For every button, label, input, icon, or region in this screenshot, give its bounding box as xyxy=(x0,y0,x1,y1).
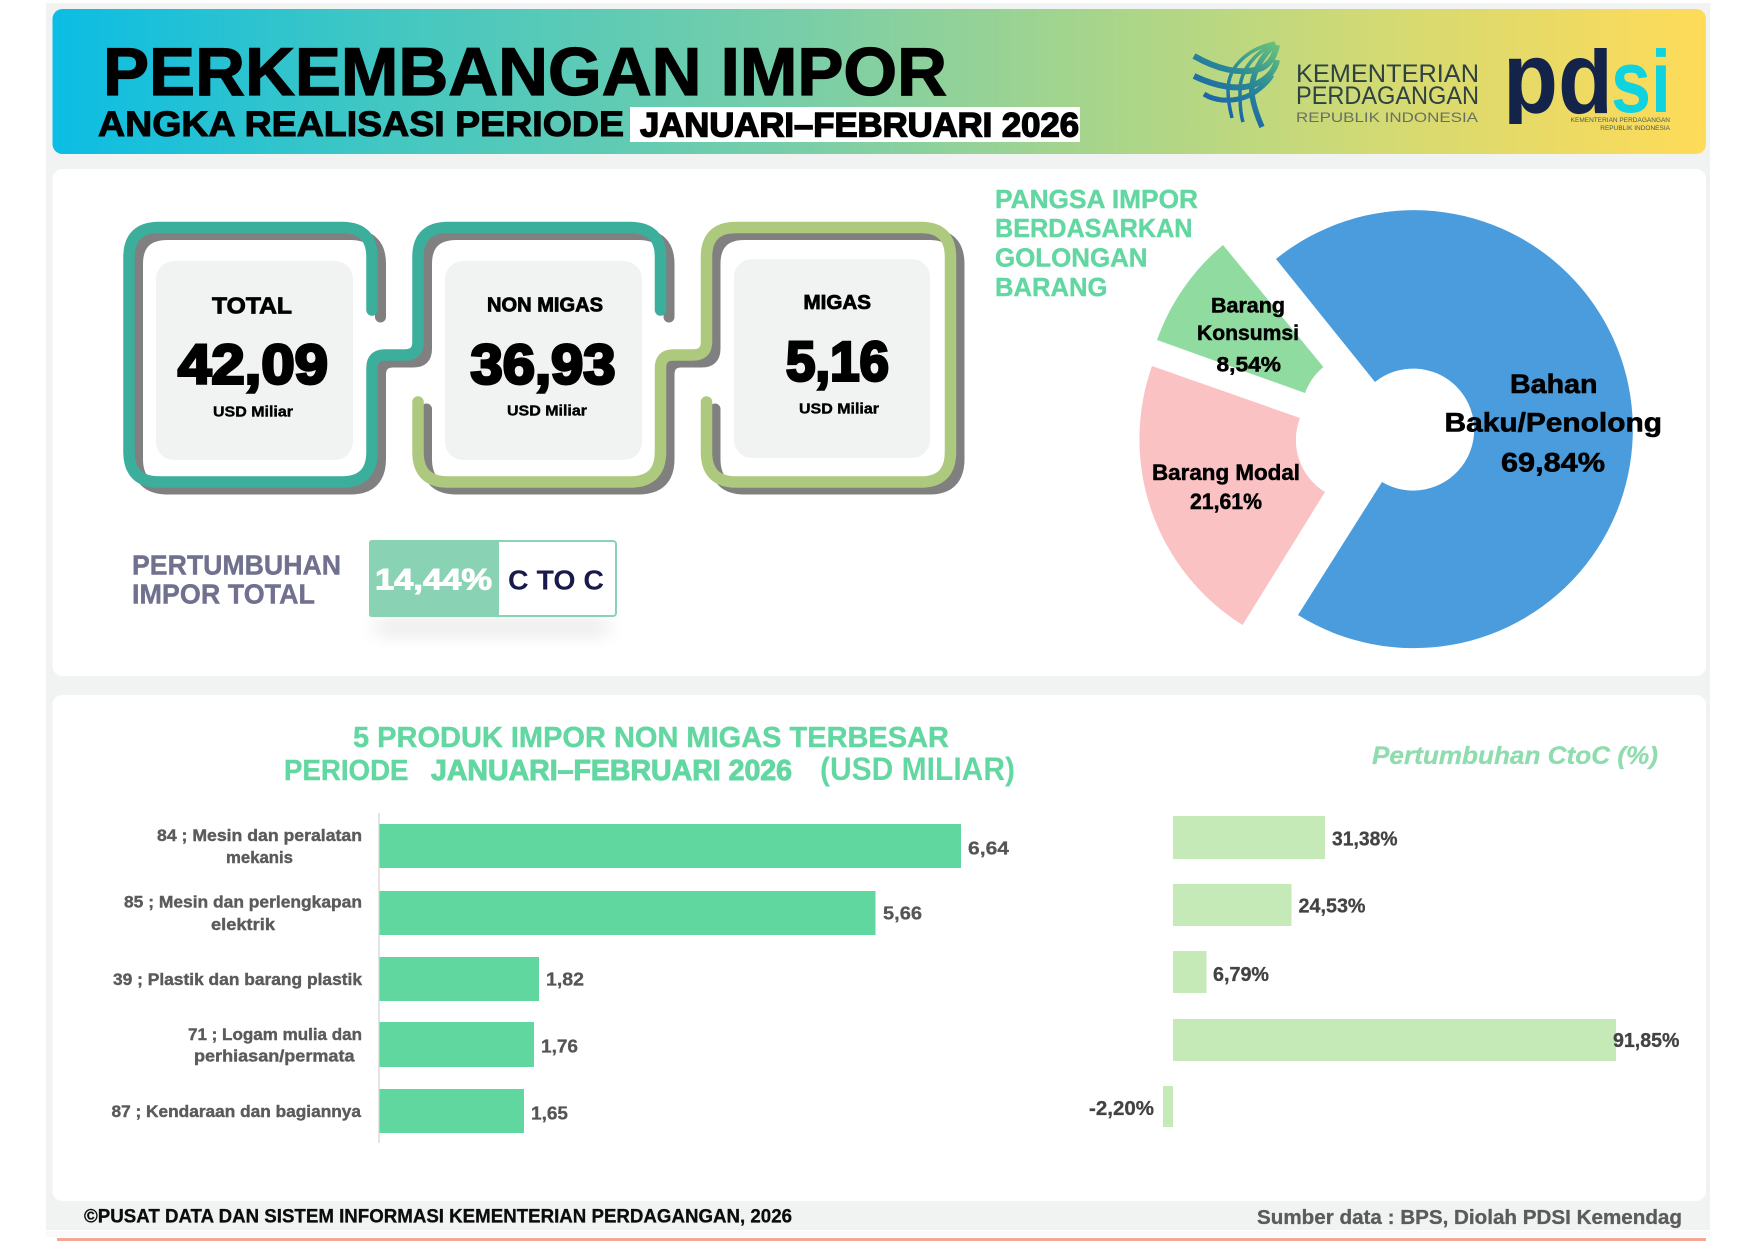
panel: summary and share xyxy=(52,169,1706,676)
chart heading: PERIODE xyxy=(284,755,408,787)
slice: barang modal: 21,61% xyxy=(1190,489,1262,514)
kpi: non migas: 36,93 xyxy=(470,332,616,396)
period highlight: JANUARI–FEBRUARI 2026 xyxy=(640,106,1079,144)
kpi: total xyxy=(156,261,353,460)
row: kendaraan: 87 ; Kendaraan dan bagiannya xyxy=(112,1103,362,1121)
pdsi logo: si xyxy=(1611,32,1671,131)
pie chart xyxy=(1139,210,1662,648)
ministry name: KEMENTERIAN xyxy=(1296,60,1479,88)
share heading: BARANG xyxy=(995,272,1108,302)
growth heading: Pertumbuhan CtoC (%) xyxy=(1372,742,1658,770)
growth label: PERTUMBUHAN xyxy=(132,550,341,580)
row: mesin dan peralatan xyxy=(157,824,1010,868)
chart heading xyxy=(284,722,1015,787)
slice: bahan baku: 69,84% xyxy=(1501,448,1605,478)
chart heading: (USD MILIAR) xyxy=(820,751,1015,787)
row: logam mulia: perhiasan/permata xyxy=(194,1048,355,1066)
pdsi logo: REPUBLIK INDONESIA xyxy=(1600,125,1671,132)
row: plastik: 1,82 xyxy=(546,968,584,990)
kpi: migas: MIGAS xyxy=(804,292,871,314)
row: mesin dan peralatan: 84 ; Mesin dan peralatan xyxy=(157,827,362,845)
bar chart: growth: 31,38% xyxy=(1332,828,1398,850)
connected KPI frames xyxy=(129,228,959,489)
kpi: migas: USD Miliar xyxy=(799,400,879,418)
footer source: Sumber data : BPS, Diolah PDSI Kemendag xyxy=(1257,1207,1682,1229)
kpi: total: 42,09 xyxy=(178,332,328,396)
row: mesin dan perlengkapan: 85 ; Mesin dan perlengkapan xyxy=(124,894,362,912)
chart heading: JANUARI–FEBRUARI 2026 xyxy=(431,755,792,787)
row: mesin dan perlengkapan xyxy=(124,891,922,935)
kpi: total: USD Miliar xyxy=(213,404,293,420)
title: PERKEMBANGAN IMPOR xyxy=(103,34,947,110)
subtitle: ANGKA REALISASI PERIODE xyxy=(98,105,624,144)
row: logam mulia: 71 ; Logam mulia dan xyxy=(188,1026,362,1044)
slice: barang konsumsi: Konsumsi xyxy=(1197,322,1299,345)
slice: bahan baku: Bahan xyxy=(1510,369,1598,399)
pdsi logo xyxy=(1508,48,1670,130)
ministry name: REPUBLIK INDONESIA xyxy=(1296,109,1479,125)
share heading: GOLONGAN xyxy=(995,242,1148,272)
kpi: migas: 5,16 xyxy=(786,330,889,392)
slice: barang konsumsi: 8,54% xyxy=(1216,354,1281,376)
growth badge: C TO C xyxy=(508,564,604,596)
icon: ministry emblem xyxy=(1194,43,1277,127)
slice: bahan baku: Baku/Penolong xyxy=(1444,408,1662,438)
row: mesin dan peralatan: 6,64 xyxy=(968,838,1010,858)
footer credit: ©PUSAT DATA DAN SISTEM INFORMASI KEMENTERIAN PERDAGANGAN, 2026 xyxy=(84,1206,792,1228)
kpi: non migas: NON MIGAS xyxy=(487,294,603,316)
pdsi logo: pd xyxy=(1503,21,1613,135)
bar chart: growth: -2,20% xyxy=(1089,1098,1154,1120)
pdsi logo: KEMENTERIAN PERDAGANGAN xyxy=(1571,117,1670,124)
slice: barang modal: Barang Modal xyxy=(1152,460,1300,485)
slice: barang konsumsi: Barang xyxy=(1211,294,1285,318)
row: mesin dan perlengkapan: 5,66 xyxy=(883,902,922,924)
share heading xyxy=(995,184,1198,302)
kpi: non migas xyxy=(445,261,642,460)
bar chart: import value xyxy=(112,813,1010,1143)
row: mesin dan peralatan: mekanis xyxy=(226,849,293,867)
header banner xyxy=(52,9,1706,154)
row: plastik: 39 ; Plastik dan barang plastik xyxy=(113,971,363,989)
bar chart: growth xyxy=(1089,816,1680,1127)
growth label xyxy=(132,550,341,610)
row: kendaraan: 1,65 xyxy=(531,1102,568,1124)
row: plastik xyxy=(113,957,584,1001)
row: mesin dan perlengkapan: elektrik xyxy=(211,916,276,934)
panel: top five products xyxy=(52,695,1706,1201)
kpi: migas xyxy=(734,259,930,458)
bar chart: growth: 6,79% xyxy=(1213,964,1269,986)
growth label: IMPOR TOTAL xyxy=(132,578,315,610)
bar chart: growth: 91,85% xyxy=(1613,1030,1680,1052)
kpi: non migas: USD Miliar xyxy=(507,402,587,420)
row: logam mulia: 1,76 xyxy=(541,1036,578,1056)
slice: barang modal xyxy=(1139,366,1325,625)
kpi: total: TOTAL xyxy=(212,292,292,318)
slice: bahan baku xyxy=(1276,210,1662,648)
ministry name xyxy=(1296,60,1479,125)
growth badge xyxy=(369,540,616,634)
share heading: PANGSA IMPOR xyxy=(995,184,1198,214)
slice: barang konsumsi xyxy=(1157,245,1323,393)
ministry name: PERDAGANGAN xyxy=(1296,82,1479,110)
chart heading: 5 PRODUK IMPOR NON MIGAS TERBESAR xyxy=(353,722,949,754)
row: kendaraan xyxy=(112,1089,568,1133)
bar chart: growth: 24,53% xyxy=(1298,896,1366,918)
row: logam mulia xyxy=(188,1022,578,1067)
growth badge: 14,44% xyxy=(375,564,492,596)
share heading: BERDASARKAN xyxy=(995,213,1192,243)
